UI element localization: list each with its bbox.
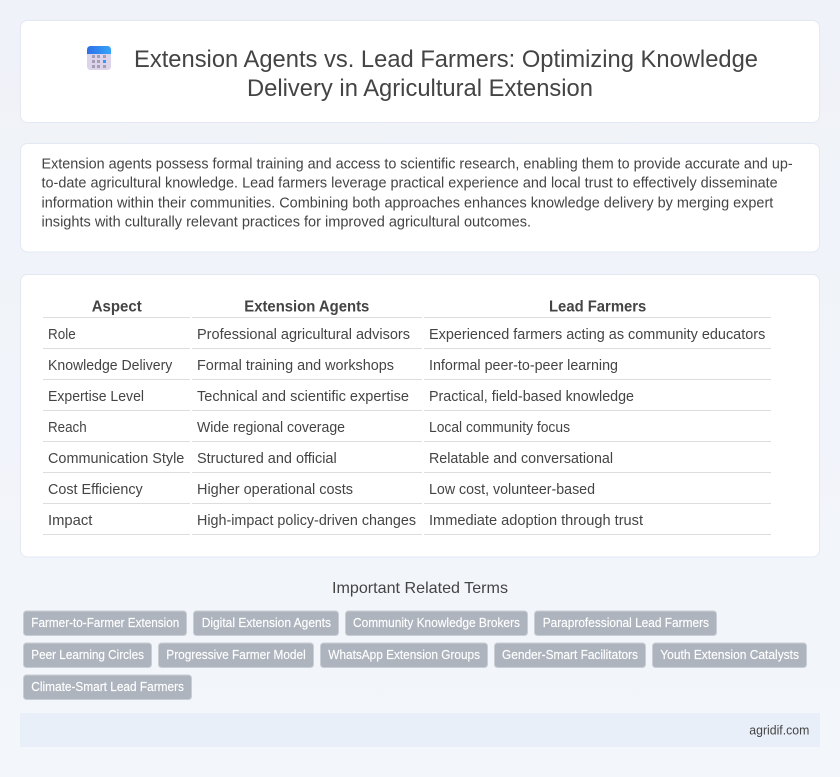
table row: impact — [43, 513, 771, 535]
table header row: Aspect — [92, 299, 142, 316]
footer — [20, 713, 820, 747]
chip: Farmer-to-Farmer Extension — [24, 611, 186, 636]
text block: introduction paragraph: to-date agricultural knowledge. Lead farmers leverage practical experience and local trust to effectively disseminate — [42, 176, 778, 192]
table row: expertise level: Technical and scientific expertise — [197, 389, 409, 405]
table header row — [43, 299, 771, 318]
table row: impact: High-impact policy-driven changes — [197, 513, 416, 529]
chip: Paraprofessional Lead Farmers: Paraprofessional Lead Farmers — [543, 616, 709, 630]
chip: Peer Learning Circles: Peer Learning Circles — [31, 648, 144, 662]
table row: role — [43, 327, 771, 349]
chip: WhatsApp Extension Groups: WhatsApp Extension Groups — [328, 648, 480, 662]
title: Delivery in Agricultural Extension — [247, 75, 593, 102]
chip: Digital Extension Agents: Digital Extension Agents — [202, 616, 331, 630]
table row: impact: Impact — [48, 513, 92, 529]
panel: related term chips — [24, 611, 806, 700]
table row: communication style: Relatable and conversational — [429, 451, 613, 467]
table row: expertise level — [43, 389, 771, 411]
table row: expertise level: Expertise Level — [48, 389, 144, 405]
text block: introduction paragraph: Extension agents possess formal training and access to scientific research, enabling them to provide accurate and up- — [42, 156, 793, 172]
table row: communication style — [43, 451, 771, 473]
table row: cost efficiency: Higher operational costs — [197, 482, 353, 498]
table row: reach — [43, 420, 771, 442]
chip: Paraprofessional Lead Farmers — [534, 611, 716, 636]
icon: calendar — [87, 46, 111, 70]
footer: agridif.com — [749, 722, 809, 737]
chip: Farmer-to-Farmer Extension: Farmer-to-Farmer Extension — [31, 616, 179, 630]
chip: Youth Extension Catalysts — [652, 643, 806, 668]
text block: introduction paragraph: information within their communities. Combining both approaches enhances knowledge delivery by merging expert — [42, 195, 773, 211]
chip: WhatsApp Extension Groups — [320, 643, 488, 668]
table row: role: Experienced farmers acting as community educators — [429, 327, 765, 343]
chip: Peer Learning Circles — [24, 643, 152, 668]
chip: Progressive Farmer Model — [158, 643, 314, 668]
table row: knowledge delivery: Formal training and workshops — [197, 358, 394, 374]
table header row: Extension Agents — [244, 299, 369, 316]
table header row: Lead Farmers — [549, 299, 646, 316]
table row: knowledge delivery: Informal peer-to-peer learning — [429, 358, 618, 374]
chip: Gender-Smart Facilitators: Gender-Smart Facilitators — [502, 648, 638, 662]
panel: header — [20, 20, 820, 122]
chip: Progressive Farmer Model: Progressive Farmer Model — [166, 648, 306, 662]
text block: introduction paragraph: insights with culturally relevant practices for improved agricultural outcomes. — [42, 215, 531, 231]
chip: Youth Extension Catalysts: Youth Extension Catalysts — [660, 648, 799, 662]
chip: Climate-Smart Lead Farmers: Climate-Smart Lead Farmers — [31, 680, 184, 694]
table row: reach: Wide regional coverage — [197, 420, 345, 436]
chip: Gender-Smart Facilitators — [494, 643, 646, 668]
panel: comparison table — [20, 274, 820, 557]
table row: impact: Immediate adoption through trust — [429, 513, 643, 529]
table row: communication style: Structured and official — [197, 451, 337, 467]
table row: reach: Local community focus — [429, 420, 570, 436]
panel: introduction — [20, 144, 820, 252]
table row: knowledge delivery: Knowledge Delivery — [48, 358, 173, 374]
table row: role: Role — [48, 327, 76, 343]
title: Extension Agents vs. Lead Farmers: Optimizing Knowledge — [134, 46, 758, 73]
table row: knowledge delivery — [43, 358, 771, 380]
chip: Climate-Smart Lead Farmers — [24, 675, 192, 700]
table row: cost efficiency — [43, 482, 771, 504]
chip: Community Knowledge Brokers: Community Knowledge Brokers — [353, 616, 520, 630]
table row: reach: Reach — [48, 420, 87, 436]
heading: important related terms: Important Related Terms — [332, 580, 508, 597]
table row: cost efficiency: Low cost, volunteer-based — [429, 482, 595, 498]
table row: communication style: Communication Style — [48, 451, 184, 467]
table row: role: Professional agricultural advisors — [197, 327, 410, 343]
table row: expertise level: Practical, field-based knowledge — [429, 389, 634, 405]
table row: cost efficiency: Cost Efficiency — [48, 482, 143, 498]
chip: Digital Extension Agents — [194, 611, 338, 636]
chip: Community Knowledge Brokers — [346, 611, 528, 636]
